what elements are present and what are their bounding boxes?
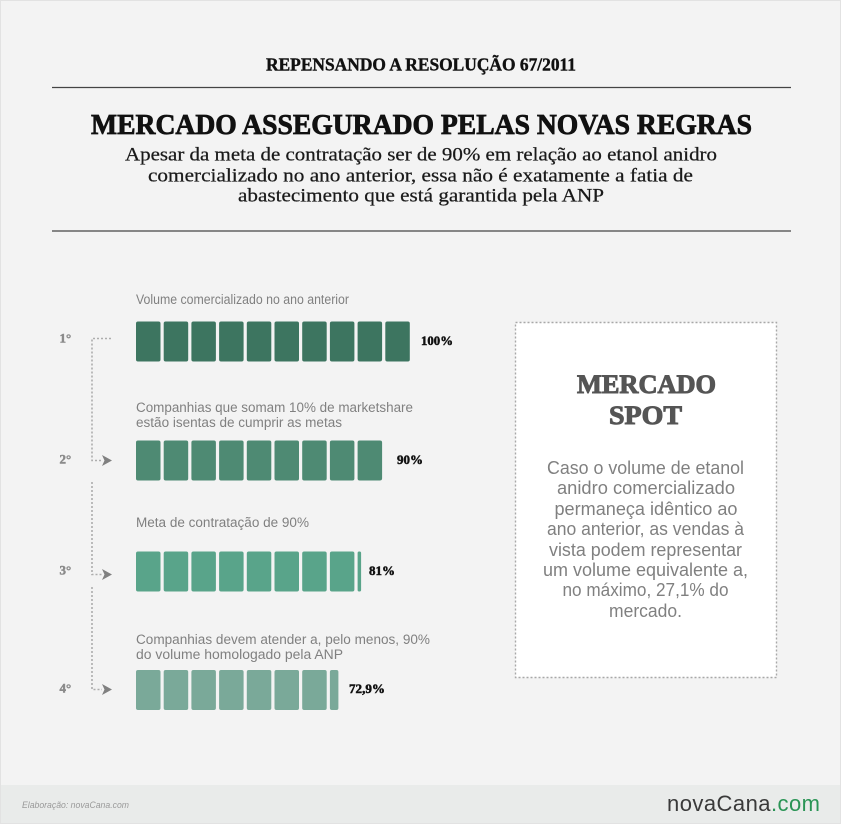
connector arrows bbox=[92, 338, 111, 690]
row 2 label bbox=[136, 400, 413, 430]
panel text: anidro comercializado bbox=[557, 478, 735, 498]
step numbers: 2° bbox=[60, 452, 71, 466]
row 2 label: Companhias que somam 10% de marketshare bbox=[136, 400, 413, 415]
panel text bbox=[543, 458, 748, 621]
title: MERCADO ASSEGURADO PELAS NOVAS REGRAS bbox=[91, 109, 752, 141]
row 3 value: 81% bbox=[369, 563, 395, 578]
subtitle: comercializado no ano anterior, essa não é exatamente a fatia de bbox=[148, 165, 693, 186]
logo: novaCana.com bbox=[667, 791, 820, 816]
row 4 label bbox=[136, 632, 430, 662]
panel text: um volume equivalente a, bbox=[543, 560, 748, 580]
row 4 bar: 72,9% bbox=[136, 670, 338, 710]
panel text: Caso o volume de etanol bbox=[547, 458, 744, 478]
row 2 bar: 90% bbox=[136, 440, 382, 480]
row 1 label: Volume comercializado no ano anterior bbox=[136, 292, 349, 307]
footer bar bbox=[1, 785, 840, 823]
row 3 bar: 81% bbox=[136, 552, 361, 592]
step numbers: 3° bbox=[60, 562, 71, 578]
step numbers: 4° bbox=[60, 680, 71, 696]
subtitle: abastecimento que está garantida pela ANP bbox=[238, 186, 604, 207]
row 3 label: Meta de contratação de 90% bbox=[136, 515, 309, 530]
footer credit: Elaboração: novaCana.com bbox=[22, 800, 129, 811]
panel heading bbox=[577, 370, 716, 430]
subtitle: Apesar da meta de contratação ser de 90% em relação ao etanol anidro bbox=[125, 145, 717, 166]
row 4 label: do volume homologado pela ANP bbox=[136, 647, 343, 662]
panel text: vista podem representar bbox=[549, 540, 742, 560]
step numbers: 1° bbox=[60, 330, 71, 346]
row 1 value: 100% bbox=[421, 333, 453, 348]
row 4 label: Companhias devem atender a, pelo menos, 90% bbox=[136, 632, 430, 647]
row 4 value: 72,9% bbox=[349, 681, 385, 696]
row 2 value: 90% bbox=[397, 452, 423, 467]
row 1 bar: 100% bbox=[136, 322, 410, 362]
panel text: no máximo, 27,1% do bbox=[562, 580, 728, 600]
panel text: permaneça idêntico ao bbox=[554, 499, 738, 519]
step numbers bbox=[60, 330, 71, 696]
row 2 label: estão isentas de cumprir as metas bbox=[136, 415, 342, 430]
header kicker: REPENSANDO A RESOLUÇÃO 67/2011 bbox=[266, 54, 576, 74]
subtitle bbox=[125, 145, 717, 207]
panel text: mercado. bbox=[609, 601, 682, 621]
panel heading: SPOT bbox=[609, 401, 682, 430]
panel text: ano anterior, as vendas à bbox=[547, 519, 745, 539]
panel heading: MERCADO bbox=[577, 370, 716, 399]
panel: mercado spot bbox=[516, 322, 776, 678]
